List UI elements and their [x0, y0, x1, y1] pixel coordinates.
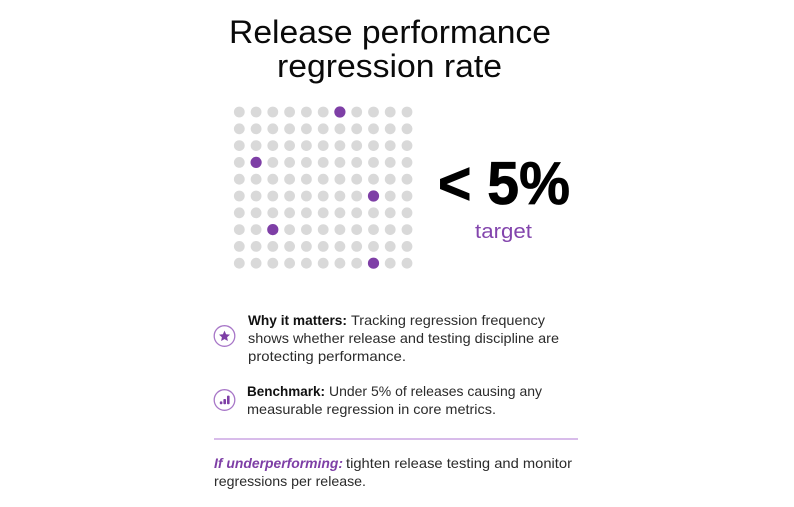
- text: benchmark: Under 5% of releases causing any: [329, 383, 542, 399]
- text: why it matters: protecting performance.: [248, 348, 406, 364]
- text: why it matters: Why it matters:: [248, 312, 347, 328]
- text: why it matters: [248, 312, 559, 364]
- stat caption: target: target: [475, 221, 532, 243]
- text: benchmark: Benchmark:: [247, 383, 325, 399]
- text: benchmark: measurable regression in core metrics.: [247, 401, 496, 417]
- icon: signal bars in circle: [214, 390, 235, 410]
- title: regression rate: [277, 48, 502, 84]
- text: why it matters: shows whether release and testing discipline are: [248, 330, 559, 346]
- text: if underperforming: regressions per release.: [214, 473, 366, 489]
- text: if underperforming: tighten release testing and monitor: [346, 455, 572, 471]
- text: why it matters: Tracking regression frequency: [351, 312, 545, 328]
- title: Release performance: [229, 14, 551, 50]
- icon: star in circle: [214, 326, 235, 346]
- big stat: less than 5%: < 5%: [438, 150, 570, 217]
- title: [229, 14, 551, 84]
- dot matrix chart: 5 of 110 highlighted: [234, 106, 412, 269]
- text: if underperforming: If underperforming:: [214, 455, 343, 471]
- text: benchmark: [247, 383, 542, 417]
- text: if underperforming: [214, 455, 572, 489]
